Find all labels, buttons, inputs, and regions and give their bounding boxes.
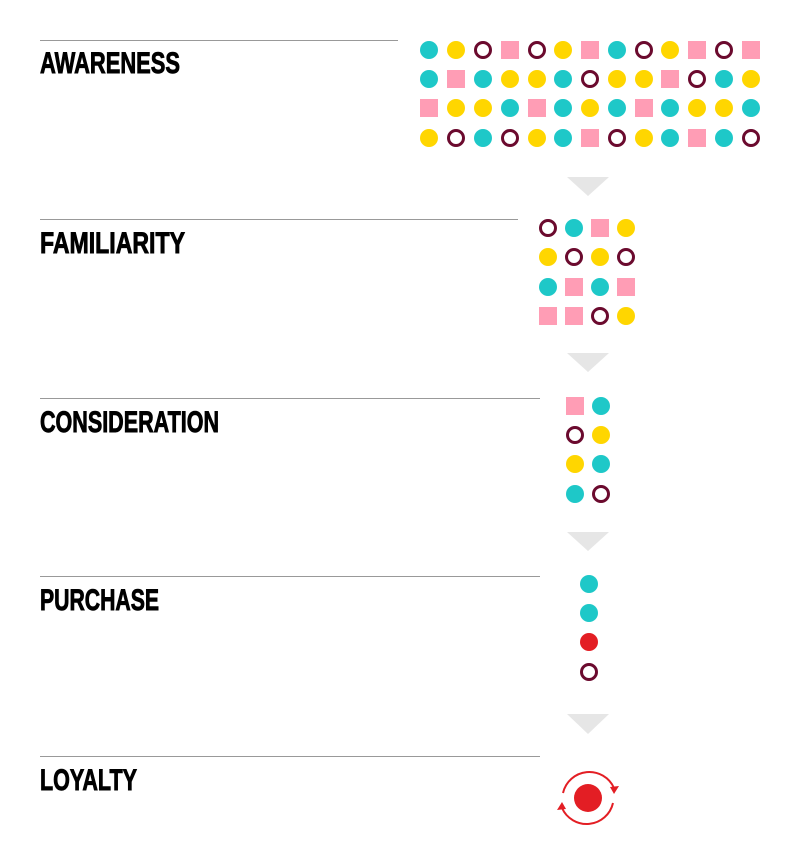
shape grid: consideration: [566, 397, 610, 503]
arrow 3: [567, 532, 609, 551]
shape grid: awareness: [420, 41, 760, 147]
arrow 2: [567, 353, 609, 372]
panel: awareness: [40, 40, 760, 147]
shape grid: familiarity: [539, 219, 635, 325]
heading: loyalty: LOYALTY: [40, 764, 137, 797]
heading: purchase: PURCHASE: [40, 584, 159, 617]
arrow 4: [567, 714, 609, 734]
icon: loyalty cycle: [557, 772, 619, 824]
panel: consideration: [40, 397, 610, 503]
arrow 1: [567, 177, 609, 196]
shape column: purchase: [580, 575, 598, 680]
panel: purchase: [40, 575, 598, 680]
panel: familiarity: [40, 219, 635, 325]
heading: awareness: AWARENESS: [40, 47, 180, 80]
heading: consideration: CONSIDERATION: [40, 406, 219, 439]
heading: familiarity: FAMILIARITY: [40, 227, 185, 260]
panel: loyalty: [40, 756, 619, 824]
